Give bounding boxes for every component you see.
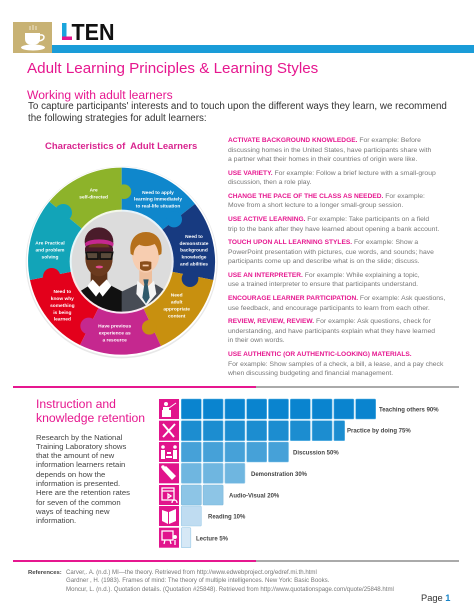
segment: self-directed: self-directed: [79, 195, 108, 201]
retention body text: depends on how the: [36, 470, 105, 479]
row: practice by doing: [181, 421, 345, 441]
segment: previous experience: experience as: [99, 331, 131, 337]
strategies list: [228, 137, 445, 376]
segment: need to apply learning: [117, 168, 195, 262]
segment: demonstrate background knowledge: Need to: [185, 234, 203, 240]
chart labels: Demonstration 30%: [251, 472, 308, 478]
row: teaching others: [181, 399, 376, 419]
strategy text line: use feedback, and encourage participants to learn from each other.: [228, 304, 430, 312]
segment: demonstrate background knowledge: knowledge: [182, 255, 207, 261]
segment: demonstrate background knowledge: [122, 204, 215, 280]
retention chart: [159, 398, 439, 548]
wheel diagram: [26, 166, 218, 358]
woman: [81, 227, 123, 312]
icon: books: [162, 509, 176, 524]
segment: need adult appropriate content: appropriate: [163, 306, 190, 312]
segment: need to know why: know why: [51, 296, 74, 302]
subheading: working with adult learners: Working with adult learners: [27, 88, 173, 102]
reference: Carver: Carver,. A. (n.d.) MI—the theory. Retrieved from http://www.edwebproject.org/edref.mi.th.html: [66, 568, 317, 576]
segment: self-directed: [49, 168, 122, 262]
row: audio-visual: [181, 485, 223, 505]
strategy: activate background knowledge: ACTIVATE BACKGROUND KNOWLEDGE. For example: Before: [228, 137, 421, 144]
title: Adult Learning Principles & Learning Styles: [27, 60, 318, 77]
strategy text line: understanding, and have participants explain what they have learned: [228, 328, 435, 334]
segment: demonstrate background knowledge: background: [180, 248, 208, 254]
strategy: use variety: USE VARIETY. For example: Follow a brief lecture with a small-group: [228, 170, 436, 176]
strategy: change the pace: CHANGE THE PACE OF THE CLASS AS NEEDED. For example:: [228, 192, 425, 200]
puzzle knob: teal into green: [55, 204, 72, 221]
segment: self-directed: Are: [90, 188, 98, 194]
segment: practical and problem solving: [28, 202, 122, 285]
row: demonstration: [181, 463, 245, 483]
chart labels: Audio-Visual 20%: [229, 494, 280, 500]
segment: need to apply learning: to real-life situation: [136, 203, 180, 209]
segment: practical and problem solving: Are Practical: [35, 240, 65, 246]
reference: Gardner: Gardner , H. (1983). Frames of mind: The theory of multiple intelligences. New York: Basic Books.: [66, 577, 329, 584]
page number: Page 1: [421, 593, 450, 603]
segment: practical and problem solving: and problem: [36, 247, 64, 253]
strategy: use active learning: USE ACTIVE LEARNING. For example: Take participants on a field: [228, 216, 429, 222]
icon: coffee cup: [13, 22, 52, 53]
references label: References:: [28, 570, 62, 576]
icons column: [159, 399, 179, 548]
strategy text line: discussing homes in the United States, have participants share with: [228, 146, 431, 154]
strategy: use authentic materials: USE AUTHENTIC (OR AUTHENTIC-LOOKING) MATERIALS.: [228, 350, 412, 358]
segment: previous experience: Have previous: [98, 324, 131, 330]
strategy: touch upon all learning styles: TOUCH UPON ALL LEARNING STYLES. For example: Show a: [228, 239, 418, 246]
heading: instruction and knowledge retention: [36, 397, 145, 424]
strategy text line: a partner what their homes in their countries of origin were like.: [228, 156, 417, 163]
chart labels: [196, 408, 439, 542]
retention body text: for seven of the common: [36, 498, 121, 507]
reference: Moncur: Moncur, L. (n.d.). Quotation details. (Quotation #25848). Retrieved from http://www.quotationspage.com/quote/25848.html: [66, 586, 394, 592]
logo: LTEN: TEN: [72, 19, 114, 45]
strategy text line: participants come up and describe what is on the slide; discuss.: [228, 258, 420, 264]
segment: need to know why: something: [50, 303, 75, 309]
strategy text line: in their own words.: [228, 337, 285, 344]
strategy: review: REVIEW, REVIEW, REVIEW. For example: Ask questions, check for: [228, 318, 431, 325]
segment: previous experience: a resource: [102, 338, 127, 344]
strategy text line: use a trained interpreter to ensure that participants understand.: [228, 281, 418, 288]
icon: teacher: [162, 402, 176, 417]
chart labels: Discussion 50%: [293, 450, 339, 456]
illustration: two adult learners: [72, 212, 172, 312]
header logo band: [13, 19, 474, 53]
row: reading: [181, 506, 201, 526]
icon: demonstration tool: [161, 465, 176, 480]
icon: presentation board: [162, 531, 176, 545]
icon: discussion: [161, 445, 177, 459]
strategy text line: Move from a short lecture to a longer small-group session.: [228, 202, 403, 209]
retention body text: information is presented.: [36, 479, 120, 488]
row: discussion: [181, 442, 288, 462]
segment: need adult appropriate content: Need: [171, 293, 183, 299]
retention body text: that the amount of new: [36, 451, 114, 460]
strategy text line: For example: Show samples of a check, a bill, a lease, and a pay check: [228, 360, 443, 368]
man: [122, 232, 164, 312]
intro text: the following strategies for adult learners:: [28, 113, 207, 124]
strategy: encourage learner participation: ENCOURAGE LEARNER PARTICIPATION. For example: Ask questions,: [228, 295, 445, 302]
segment: previous experience: [80, 262, 161, 355]
icon: crossed tools: [163, 424, 175, 437]
heading: characteristics of adult learners: Characteristics of Adult Learners: [45, 141, 197, 152]
intro text: To capture participants' interests and to touch upon the different ways they learn, we recommend: [28, 101, 447, 112]
segment: need to know why: [30, 262, 122, 345]
strategy text line: trip to the bank after they have learned about opening a bank account.: [228, 226, 439, 232]
heading: instruction and knowledge retention: Instruction and: [36, 397, 116, 411]
retention body text: Here are the retention rates: [36, 488, 130, 497]
segment: need adult appropriate content: adult: [171, 299, 183, 305]
segment: practical and problem solving: solving: [42, 254, 58, 260]
segment: need to apply learning: Need to apply: [142, 190, 174, 196]
segment: demonstrate background knowledge: and abilities: [180, 261, 208, 267]
retention body text: information.: [36, 516, 76, 525]
segment: demonstrate background knowledge: demonstrate: [180, 241, 209, 247]
segment: need adult appropriate content: content: [168, 313, 186, 319]
references: [28, 568, 394, 592]
blue header bar: [52, 45, 474, 53]
icon: video and headphones: [162, 488, 177, 503]
retention body text: Training Laboratory shows: [36, 442, 126, 451]
strategy text line: PowerPoint presentation with pictures, cue words, and sounds; have: [228, 248, 434, 256]
retention body text: [36, 432, 130, 525]
segment: need to know why: Need to: [53, 289, 71, 295]
chart labels: Practice by doing 75%: [347, 428, 411, 434]
heading: instruction and knowledge retention: knowledge retention: [36, 410, 145, 424]
segment: need to know why: learned: [54, 317, 71, 323]
chart labels: Lecture 5%: [196, 536, 229, 542]
retention body text: Research by the National: [36, 432, 122, 442]
retention body text: ways of teaching new: [36, 507, 110, 516]
strategy text line: when discussing budgeting and financial management.: [228, 370, 393, 376]
strategy text line: discussion, then a role play.: [228, 179, 311, 186]
retention body text: information learners retain: [36, 460, 125, 469]
segment: need to apply learning: learning immediately: [134, 197, 182, 203]
row: lecture: [181, 528, 191, 548]
chart labels: Reading 10%: [208, 514, 246, 520]
segment: need adult appropriate content: [122, 262, 213, 346]
strategy: use an interpreter: USE AN INTERPRETER. For example: While explaining a topic,: [228, 272, 420, 279]
intro text: [28, 101, 447, 124]
segment: need to know why: is being: [53, 310, 72, 316]
chart labels: Teaching others 90%: [379, 408, 439, 414]
